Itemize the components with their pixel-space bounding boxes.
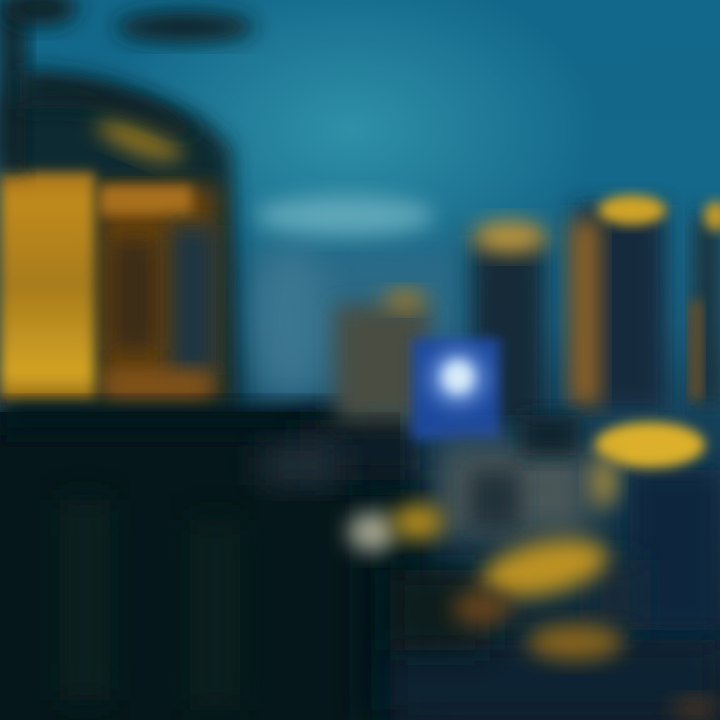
dark foreground at bottom left [0, 405, 720, 720]
left building with lit facade [0, 91, 240, 420]
skyline towers [335, 195, 720, 425]
distant pale cloud band [250, 196, 465, 400]
lower city blocks [260, 415, 720, 650]
palm silhouettes at top left [0, 0, 255, 170]
warm lights in lower right [348, 422, 719, 718]
glowing blue sign [412, 338, 500, 440]
